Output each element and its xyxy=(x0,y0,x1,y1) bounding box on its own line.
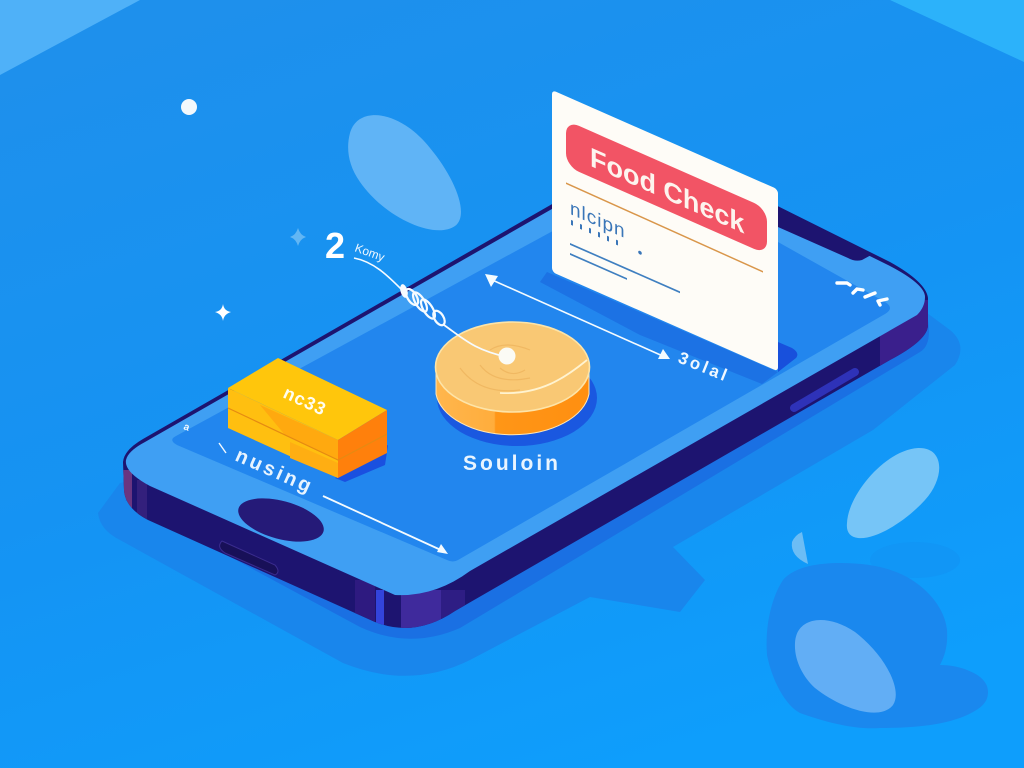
card shadow xyxy=(540,272,778,384)
arrow head: lower xyxy=(658,349,670,359)
phone screen bezel xyxy=(126,150,925,595)
corner accent: top right xyxy=(890,0,1024,62)
home button xyxy=(234,490,328,550)
tick mark xyxy=(219,443,226,453)
phone screen xyxy=(172,176,890,562)
callout label: Komy xyxy=(353,241,387,264)
title text: Food Check xyxy=(590,141,745,240)
label: total: 3olal xyxy=(676,348,732,386)
card caption: nlcipn xyxy=(570,198,626,243)
yellow block shadow xyxy=(335,445,388,482)
phone side button xyxy=(794,372,855,408)
yellow block xyxy=(228,358,387,478)
disc top xyxy=(436,322,590,412)
decorative leaf: small xyxy=(792,532,808,564)
text line: long xyxy=(570,244,680,292)
faint blob behind right leaf xyxy=(870,542,960,578)
callout number: 2 xyxy=(325,225,345,266)
decorative leaf: lower xyxy=(795,620,896,713)
caption dots xyxy=(571,222,622,245)
block top xyxy=(228,358,387,440)
body colour segments xyxy=(120,300,930,640)
disc centre ball xyxy=(498,348,516,364)
disc shadow xyxy=(437,350,597,446)
phone cast shadow: outer xyxy=(98,313,960,676)
food disc xyxy=(436,322,590,435)
caption period xyxy=(638,250,642,255)
text line: short xyxy=(570,254,627,279)
callout wire with spring xyxy=(354,258,507,357)
sparkle: blue xyxy=(290,228,306,246)
disc rim highlight xyxy=(500,360,587,393)
arrow head xyxy=(437,544,448,554)
status marks xyxy=(837,283,887,305)
decorative leaf: right xyxy=(847,448,939,538)
disc side xyxy=(436,367,589,435)
charging port xyxy=(220,541,278,575)
phone body xyxy=(123,145,928,628)
block seam xyxy=(228,408,387,460)
phone xyxy=(123,204,928,628)
label: solution: Souloin xyxy=(463,452,561,475)
orange divider xyxy=(566,183,763,272)
disc ripples xyxy=(460,345,530,391)
block text: nc33 xyxy=(280,382,330,420)
decorative dot xyxy=(181,99,197,115)
arrow head: upper xyxy=(485,274,498,287)
double arrow line xyxy=(485,274,670,359)
decorative blob: right shadow xyxy=(767,563,988,728)
sparkle: white xyxy=(215,304,231,321)
red title pill xyxy=(566,120,767,255)
phone cast shadow: inner xyxy=(125,320,929,639)
food check card xyxy=(552,90,778,371)
screen mark: a xyxy=(182,421,191,434)
block left face xyxy=(228,388,338,478)
card shadow accent xyxy=(778,342,797,372)
block lower shade xyxy=(290,442,338,478)
decorative leaf: upper xyxy=(348,115,461,230)
lower arrow xyxy=(323,496,448,554)
block right face xyxy=(338,410,387,478)
label: nursing: nusing xyxy=(232,444,317,499)
spring anchor xyxy=(399,283,409,299)
block left shade xyxy=(260,405,338,460)
phone top notch xyxy=(778,208,873,261)
card face xyxy=(552,90,778,371)
corner accent: top left xyxy=(0,0,140,75)
